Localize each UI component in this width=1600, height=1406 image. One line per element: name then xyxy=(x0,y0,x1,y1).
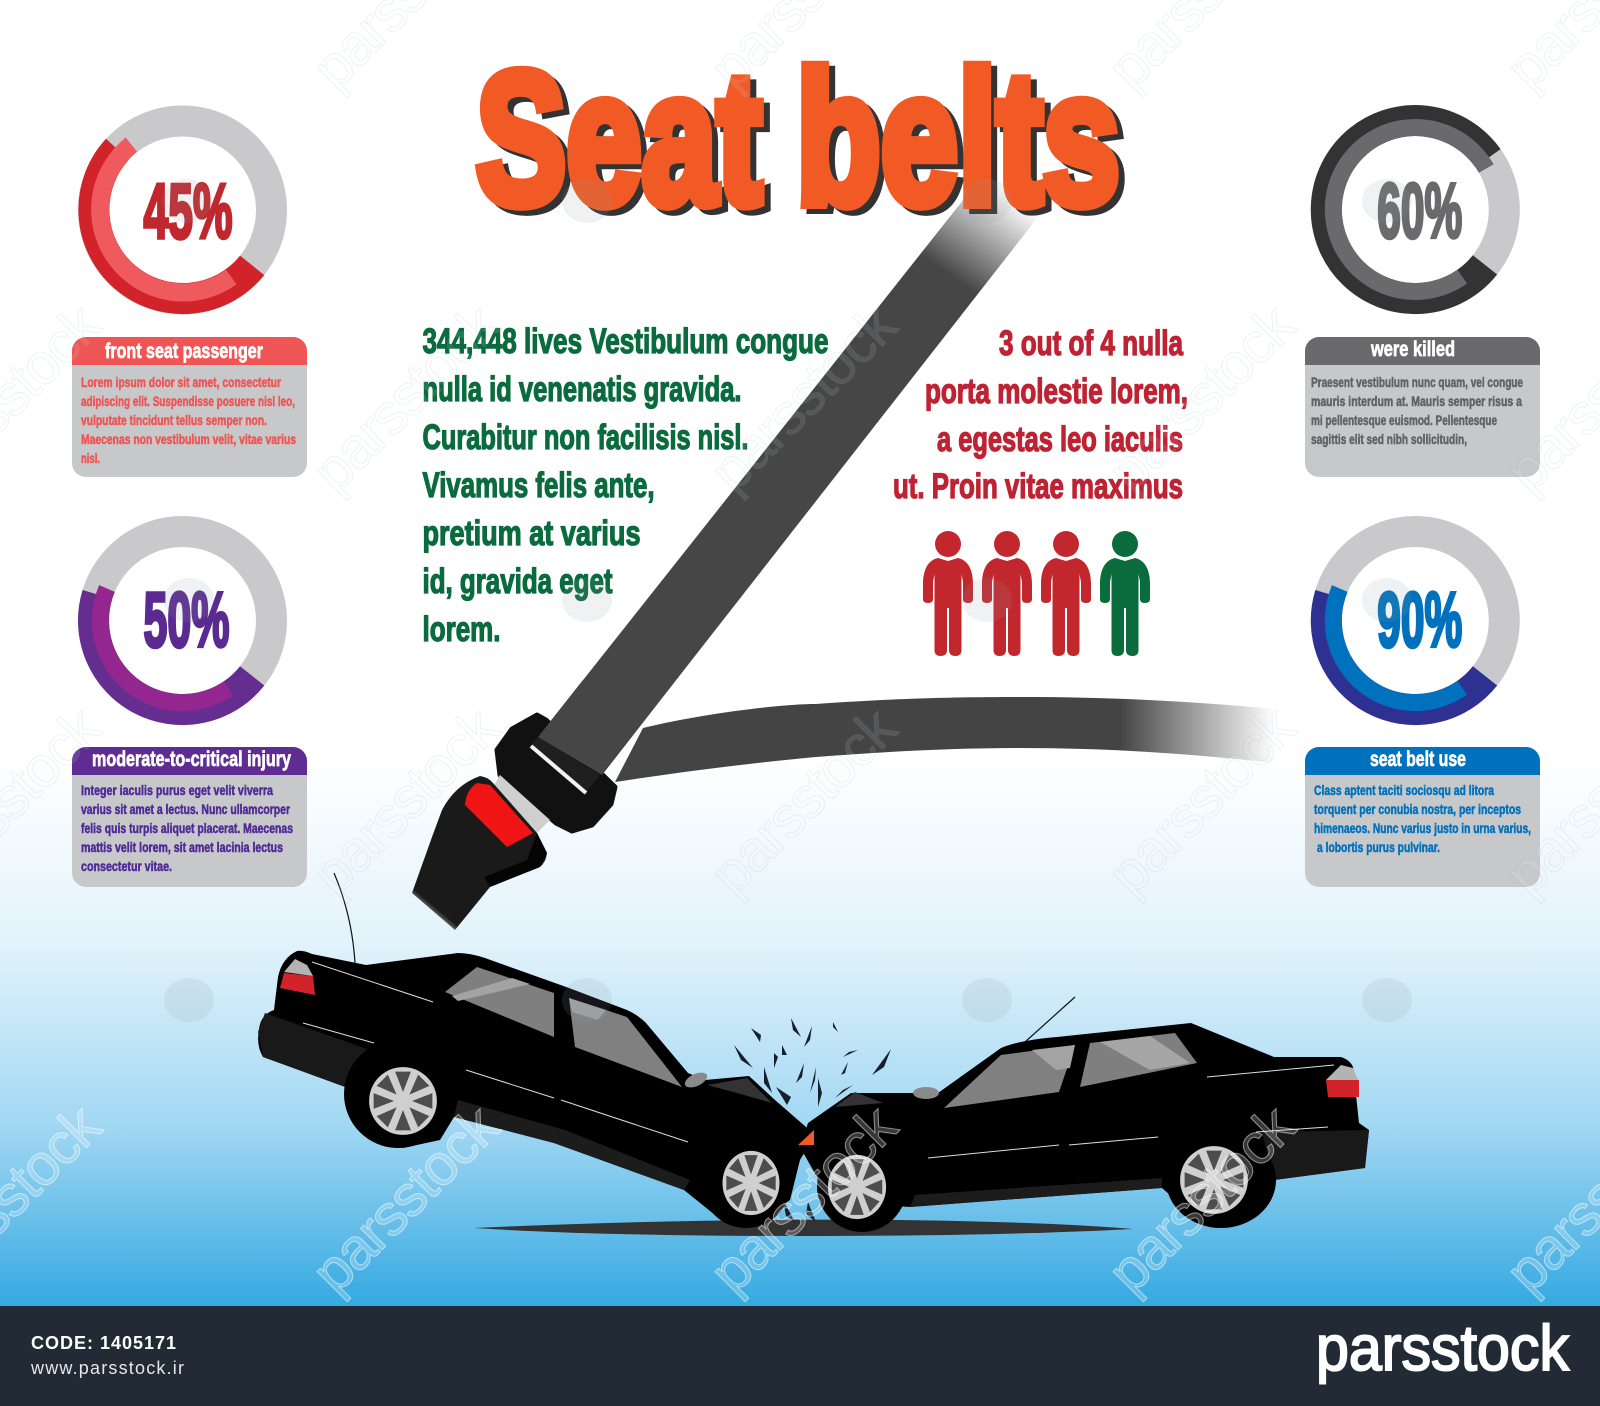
green statistic text: 344,448 lives Vestibulum congue xyxy=(422,322,828,361)
left crashed car xyxy=(258,873,814,1228)
title xyxy=(476,33,1126,248)
watermark: bottom row: parsstock xyxy=(1095,1092,1308,1305)
donut: 90% seat belt use xyxy=(1326,532,1504,710)
panel: moderate-to-critical injury: felis quis turpis aliquet placerat. Maecenas xyxy=(81,821,293,836)
seat belt upper strap xyxy=(538,185,1063,775)
watermark: elephant marks xyxy=(162,179,1412,1022)
title: Seat xyxy=(476,33,762,243)
watermark: upper rows: parsstock xyxy=(1095,291,1308,504)
watermark: upper rows xyxy=(0,0,1600,907)
panel: were killed: sagittis elit sed nibh sollicitudin, xyxy=(1311,432,1467,447)
donut: 45% front seat passenger: 45% xyxy=(144,167,232,255)
watermark: upper rows: parsstock xyxy=(299,291,512,504)
panel: seat belt use: Class aptent taciti sociosqu ad litora xyxy=(1314,783,1494,798)
title: Seat xyxy=(482,38,768,248)
watermark: bottom row: parsstock xyxy=(299,1092,512,1305)
panel: front seat passenger xyxy=(72,337,307,477)
green statistic text: Curabitur non facilisis nisl. xyxy=(422,418,748,457)
seat belt buckle xyxy=(412,680,676,930)
icon: four people, three red one green xyxy=(923,531,1150,656)
red statistic text: porta molestie lorem, xyxy=(925,372,1188,411)
panel: seat belt use: seat belt use xyxy=(1370,748,1466,771)
ground shadow xyxy=(474,1220,1133,1236)
watermark: upper rows: parsstock xyxy=(1095,694,1308,907)
panel: moderate-to-critical injury: varius sit amet a lectus. Nunc ullamcorper xyxy=(81,802,291,817)
green statistic text: pretium at varius xyxy=(422,514,640,553)
panel: seat belt use: torquent per conubia nostra, per inceptos xyxy=(1314,802,1521,817)
panel: moderate-to-critical injury: moderate-to-critical injury xyxy=(92,748,291,771)
red statistic text: ut. Proin vitae maximus xyxy=(893,467,1183,506)
title: belts xyxy=(796,33,1120,243)
donut: 60% were killed: 60% xyxy=(1377,166,1462,254)
panel: were killed: mauris interdum at. Mauris semper risus a xyxy=(1311,394,1522,409)
panel: were killed: Praesent vestibulum nunc quam, vel congue xyxy=(1311,375,1523,390)
title: belts xyxy=(802,38,1126,248)
red statistic text: a egestas leo iaculis xyxy=(937,420,1183,459)
green statistic text: Vivamus felis ante, xyxy=(422,466,654,505)
panel: front seat passenger: Maecenas non vestibulum velit, vitae varius xyxy=(81,432,296,447)
green statistic text: nulla id venenatis gravida. xyxy=(422,370,742,409)
panel: seat belt use xyxy=(1305,747,1540,887)
donut: 50% moderate-to-critical injury: 50% xyxy=(144,576,230,664)
watermark: upper rows: parsstock xyxy=(697,291,910,504)
panel: front seat passenger: front seat passenger xyxy=(105,340,263,363)
panel: moderate-to-critical injury: mattis velit lorem, sit amet lacinia lectus xyxy=(81,840,283,855)
panel: front seat passenger: nisl. xyxy=(81,451,100,466)
donut: 60% were killed xyxy=(1326,120,1504,299)
footer bar: parsstock xyxy=(1316,1312,1570,1384)
donut: 50% moderate-to-critical injury xyxy=(94,532,272,710)
footer bar: www.parsstock.ir xyxy=(30,1358,184,1378)
seat belt lower strap xyxy=(615,697,1275,782)
panel: moderate-to-critical injury: Integer iaculis purus eget velit viverra xyxy=(81,783,273,798)
watermark: bottom row: parsstock xyxy=(697,1092,910,1305)
panel: seat belt use: himenaeos. Nunc varius justo in urna varius, xyxy=(1314,821,1531,836)
watermark: upper rows: parsstock xyxy=(299,694,512,907)
panel: were killed xyxy=(1305,337,1540,477)
red statistic text: 3 out of 4 nulla xyxy=(999,324,1183,363)
panel: front seat passenger: adipiscing elit. Suspendisse posuere nisl leo, xyxy=(81,394,295,409)
donut: 90% seat belt use: 90% xyxy=(1377,576,1462,664)
panel: were killed: mi pellentesque euismod. Pellentesque xyxy=(1311,413,1497,428)
green statistic text xyxy=(422,322,828,649)
panel: moderate-to-critical injury: consectetur vitae. xyxy=(81,859,172,874)
footer bar: CODE: 1405171 xyxy=(31,1333,176,1353)
panel: seat belt use: a lobortis purus pulvinar. xyxy=(1317,840,1440,855)
watermark: upper rows: parsstock xyxy=(697,694,910,907)
footer bar xyxy=(0,1306,1600,1406)
right crashed car xyxy=(798,997,1369,1232)
panel: front seat passenger: Lorem ipsum dolor sit amet, consectetur xyxy=(81,375,282,390)
green statistic text: lorem. xyxy=(422,610,500,649)
panel: were killed: were killed xyxy=(1370,338,1455,361)
green statistic text: id, gravida eget xyxy=(422,562,613,601)
crash debris shards xyxy=(734,1018,891,1222)
red statistic text xyxy=(893,324,1188,506)
panel: moderate-to-critical injury xyxy=(72,747,307,887)
watermark: bottom row xyxy=(0,1092,1600,1305)
panel: front seat passenger: vulputate tincidunt tellus semper non. xyxy=(81,413,267,428)
donut: 45% front seat passenger xyxy=(94,121,272,299)
